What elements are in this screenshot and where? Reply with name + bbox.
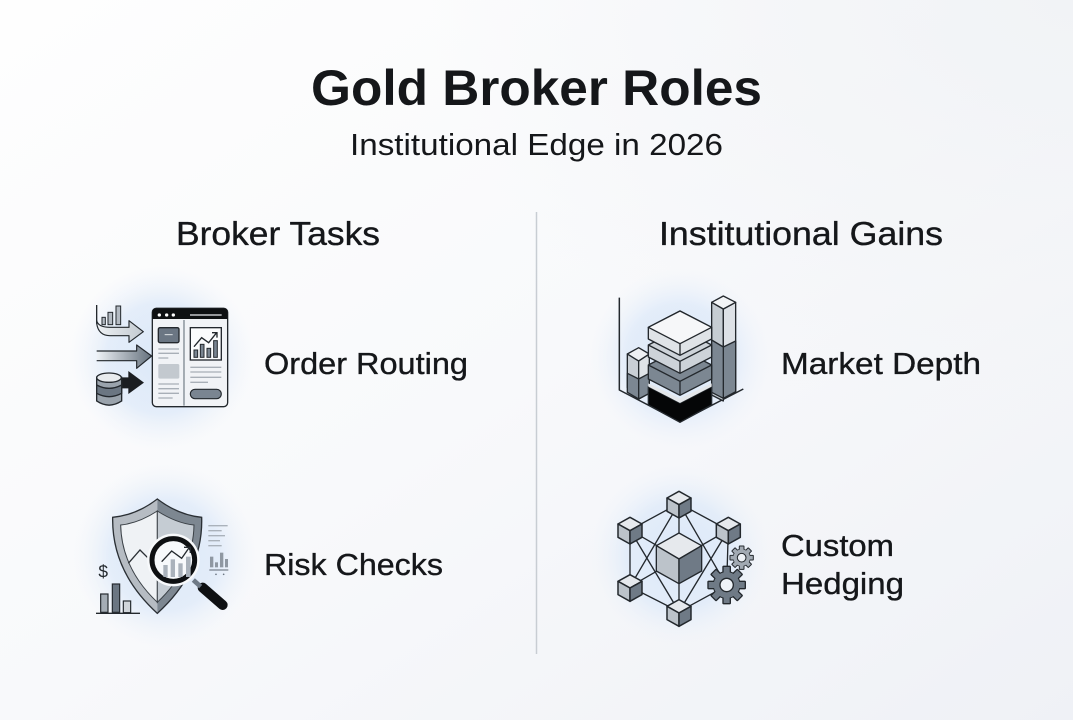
label: market depth: Market Depth	[781, 346, 981, 381]
icon: market depth	[590, 268, 770, 448]
icon: risk checks	[73, 463, 257, 647]
icon: custom hedging	[590, 465, 770, 645]
label: custom hedging: Custom	[781, 528, 894, 563]
label: risk checks: Risk Checks	[264, 547, 443, 582]
heading: broker tasks: Broker Tasks	[176, 215, 380, 252]
title: Gold Broker Roles	[311, 60, 762, 116]
divider	[536, 212, 538, 654]
heading: institutional gains: Institutional Gains	[659, 215, 943, 252]
gear: large	[708, 566, 745, 604]
subtitle: Institutional Edge in 2026	[350, 127, 723, 162]
icon: order routing	[70, 266, 254, 450]
dollar sign: $	[98, 562, 108, 582]
label: custom hedging	[781, 528, 904, 601]
panel: institutional gains	[590, 215, 981, 645]
label: custom hedging: Hedging	[781, 566, 904, 601]
label: order routing: Order Routing	[264, 346, 468, 381]
gear: small	[730, 546, 753, 569]
panel: broker tasks	[70, 215, 468, 647]
